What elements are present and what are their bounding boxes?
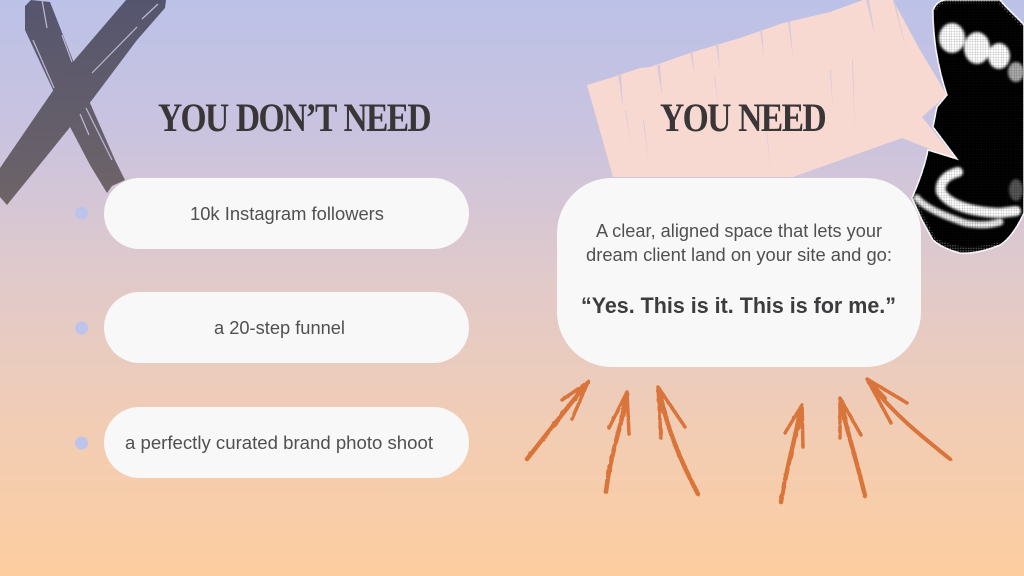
arrow 1 bbox=[527, 382, 588, 459]
icon: halftone mouth bbox=[905, 0, 1024, 260]
pill 2 bbox=[104, 292, 469, 363]
lower lip outer band bbox=[917, 198, 1000, 225]
icon: speech bubble bbox=[587, 0, 957, 177]
arrow 5 bbox=[840, 398, 865, 496]
quote: “Yes. This is it. This is for me.” bbox=[581, 293, 896, 318]
pill 1 bbox=[104, 178, 469, 249]
text line 1: A clear, aligned space that lets your bbox=[596, 220, 882, 241]
bullet 3 bbox=[75, 436, 88, 450]
inner grey bbox=[1009, 179, 1023, 201]
tooth 2 bbox=[964, 32, 990, 64]
pill 1: 10k Instagram followers bbox=[190, 203, 384, 224]
panel: you need bbox=[557, 178, 921, 367]
bullet 1 bbox=[75, 206, 88, 220]
halftone mesh bbox=[905, 0, 1024, 260]
heading: you need: YOU NEED bbox=[660, 95, 826, 140]
arrow 2 bbox=[606, 392, 629, 492]
halftone edge bbox=[912, 0, 1024, 250]
arrows bbox=[527, 379, 950, 502]
arrow 6 bbox=[867, 379, 950, 459]
pill 3 bbox=[104, 407, 469, 478]
text line 2: dream client land on your site and go: bbox=[586, 244, 892, 265]
tooth 4 bbox=[1008, 62, 1024, 82]
icon: brush X bbox=[0, 0, 166, 205]
heading: you don't need: YOU DON’T NEED bbox=[158, 95, 431, 140]
arrow 4 bbox=[781, 405, 803, 502]
lower lip highlight bbox=[941, 172, 1016, 213]
tooth 3 bbox=[988, 43, 1010, 69]
pill 2: a 20-step funnel bbox=[214, 317, 345, 338]
tooth 1 bbox=[939, 23, 965, 53]
bullet 2 bbox=[75, 322, 88, 334]
arrow 3 bbox=[658, 387, 698, 494]
pill 3: a perfectly curated brand photo shoot bbox=[125, 432, 433, 453]
